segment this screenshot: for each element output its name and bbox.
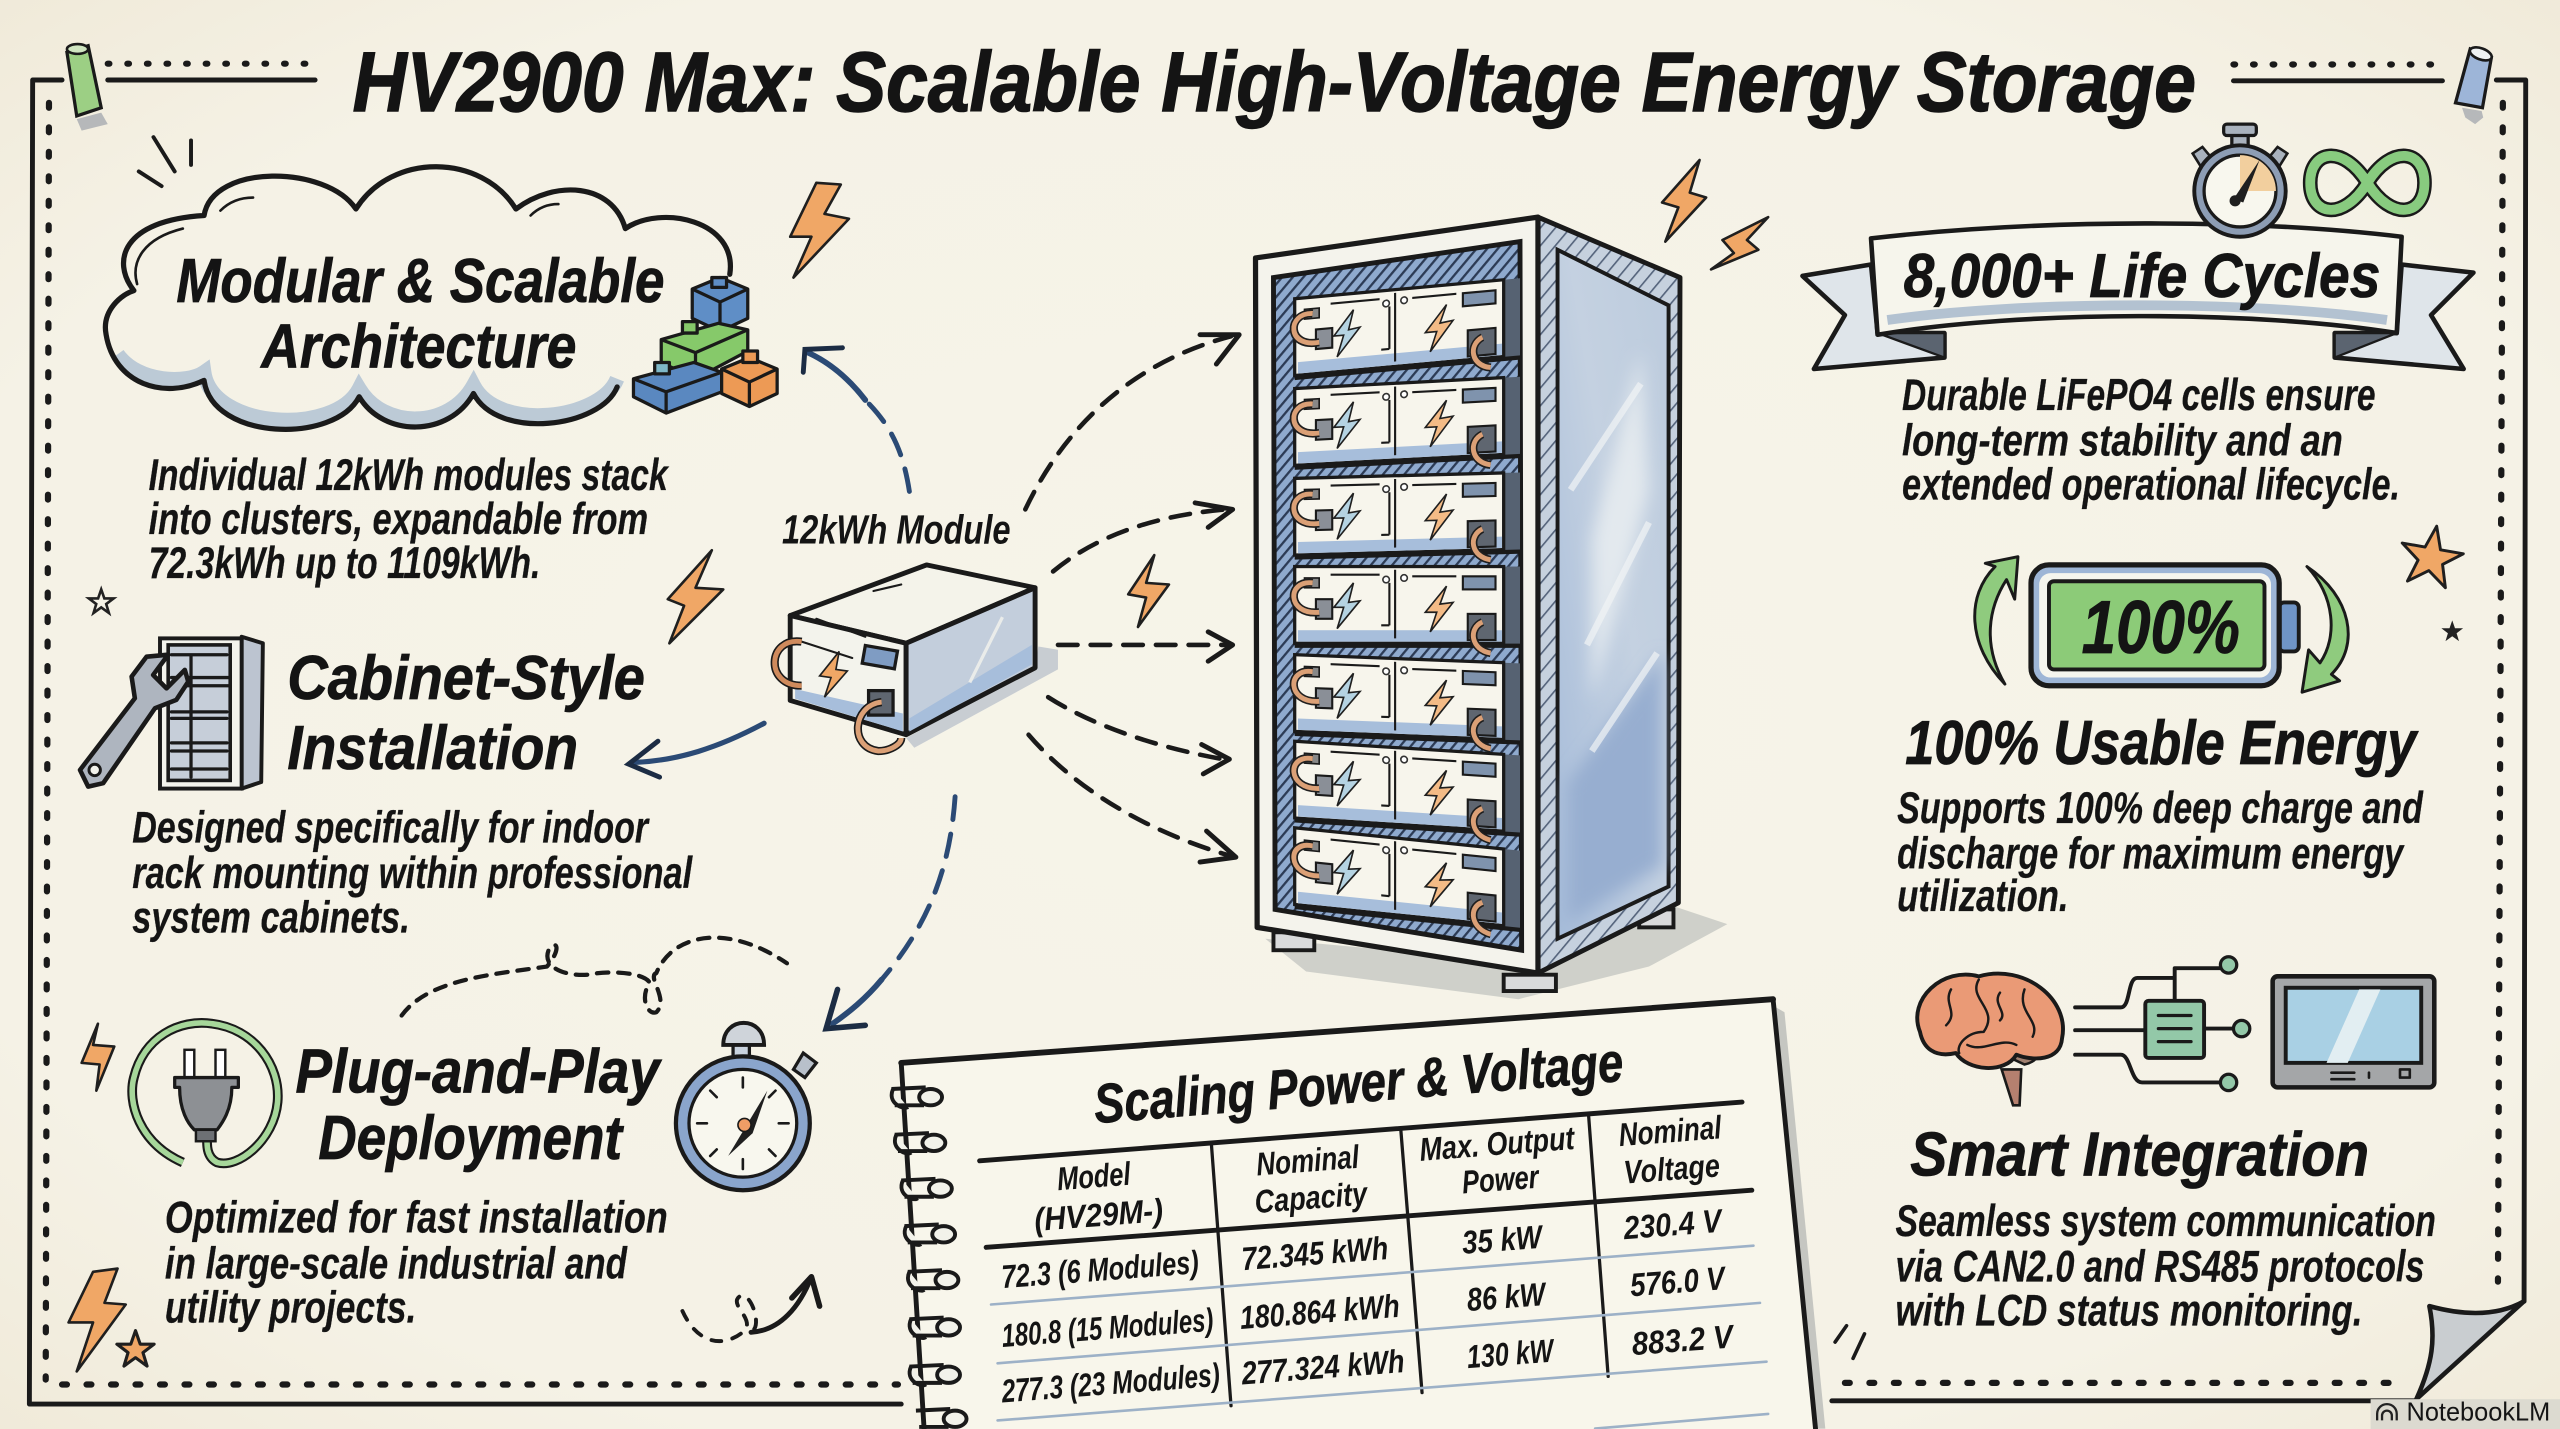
body text: long-term stability and an bbox=[1902, 417, 2343, 466]
icon: lightning bolt near arrows bbox=[1128, 555, 1169, 627]
front frame bbox=[1256, 217, 1538, 973]
heading: Smart Integration bbox=[1910, 1121, 2369, 1190]
table row: 180.8: 576.0 V bbox=[1629, 1259, 1729, 1303]
panel: cabinet-style installation: Installation bbox=[287, 714, 578, 783]
body text: into clusters, expandable from bbox=[149, 495, 648, 544]
panel: plug-and-play deployment: Deployment bbox=[318, 1104, 624, 1173]
body text: rack mounting within professional bbox=[132, 849, 693, 898]
body text bbox=[165, 1194, 668, 1332]
icon: charge arrow left bbox=[1975, 557, 2018, 684]
heading: Cabinet-Style bbox=[287, 644, 645, 713]
table header row: Nominal bbox=[1617, 1108, 1723, 1153]
decorative dashed loop bbox=[402, 938, 787, 1016]
illustration: 12kWh battery module bbox=[775, 565, 1058, 751]
body text: utilization. bbox=[1897, 872, 2069, 921]
table row: 72.3: 72.345 kWh bbox=[1240, 1229, 1389, 1277]
icon: discharge arrow right bbox=[2302, 567, 2348, 692]
icon: brain bbox=[1917, 974, 2063, 1105]
panel: modular and scalable architecture bbox=[105, 137, 730, 588]
icon: battery 100%: 100% bbox=[2082, 585, 2240, 669]
icon: stopwatch bbox=[676, 1023, 816, 1190]
icon: green pencil roll top left bbox=[67, 44, 108, 131]
table row: 277.3: 277.3 (23 Modules) bbox=[999, 1356, 1221, 1410]
side panel bbox=[1538, 217, 1680, 973]
table header row: Power bbox=[1461, 1158, 1542, 1200]
illustration: battery rack cabinet bbox=[1256, 217, 1727, 999]
icon: lightning bolt above rack bbox=[1662, 160, 1706, 242]
table row: 72.3 bbox=[1000, 1202, 1725, 1295]
body text: Optimized for fast installation bbox=[165, 1194, 668, 1243]
decorative dashed arrow bbox=[682, 1277, 820, 1341]
panel: life cycles bbox=[1802, 124, 2473, 510]
body text bbox=[1902, 371, 2400, 510]
page curl corner bbox=[2416, 1301, 2524, 1399]
table header row bbox=[1033, 1108, 1723, 1238]
arrow: module to rack bottom bbox=[1029, 735, 1236, 862]
table header row: Nominal bbox=[1255, 1138, 1361, 1183]
icon: ribbon banner bbox=[1802, 223, 2473, 369]
icon: lightning bolt bottom left bbox=[69, 1269, 126, 1371]
icon: building blocks bbox=[633, 278, 777, 413]
body text bbox=[1896, 1197, 2436, 1336]
sparkle lines bbox=[139, 137, 191, 186]
icon: small orange star bbox=[117, 1331, 154, 1366]
icon: timer bbox=[2193, 124, 2287, 237]
body text: Supports 100% deep charge and bbox=[1897, 784, 2424, 833]
spiral binding bbox=[891, 1087, 967, 1427]
table header row: Capacity bbox=[1253, 1174, 1370, 1220]
table row: 180.8: 180.8 (15 Modules) bbox=[1000, 1301, 1215, 1354]
panel: modular and scalable architecture: Architecture bbox=[259, 312, 576, 381]
heading: 8,000+ Life Cycles bbox=[1904, 242, 2380, 311]
icon: lightning bolt mid-left bbox=[668, 550, 723, 643]
icon: small outline star bbox=[89, 589, 114, 613]
heading: 100% Usable Energy bbox=[1905, 709, 2419, 778]
body text: utility projects. bbox=[165, 1283, 416, 1332]
table row: 72.3: 35 kW bbox=[1461, 1218, 1546, 1261]
sparkle strokes bottom right bbox=[1835, 1326, 1864, 1358]
rack feet bbox=[1273, 909, 1673, 991]
icon: lightning bolt right of rack bbox=[1711, 217, 1768, 269]
icon: LCD tablet bbox=[2273, 976, 2434, 1087]
body text bbox=[149, 451, 670, 588]
icon: cabinet and wrench bbox=[80, 637, 263, 789]
rack floor shadow bbox=[1265, 906, 1727, 999]
arrow: module to plug-and-play bbox=[826, 797, 955, 1029]
icon: infinity bbox=[2310, 156, 2424, 210]
panel: usable energy bbox=[1897, 557, 2424, 921]
arrow: module to modular architecture bbox=[803, 348, 909, 491]
table row: 180.8: 86 kW bbox=[1465, 1275, 1549, 1318]
table row: 277.3: 130 kW bbox=[1465, 1331, 1557, 1375]
table header row: (HV29M-) bbox=[1033, 1191, 1164, 1238]
panel: smart integration bbox=[1896, 957, 2436, 1336]
icon: large orange star bbox=[2396, 521, 2467, 590]
label: 12kWh module: 12kWh Module bbox=[782, 507, 1011, 553]
table grid bbox=[980, 1102, 1768, 1429]
body text: discharge for maximum energy bbox=[1897, 830, 2405, 879]
table row: 180.8: 180.864 kWh bbox=[1239, 1287, 1401, 1336]
table header row: Model bbox=[1056, 1155, 1132, 1197]
icon: battery 100% bbox=[2031, 565, 2299, 686]
body text: Durable LiFePO4 cells ensure bbox=[1902, 371, 2376, 420]
table row: 72.3: 72.3 (6 Modules) bbox=[1000, 1243, 1200, 1295]
title: HV2900 Max: Scalable High-Voltage Energy Storage bbox=[353, 34, 2196, 129]
arrow: module to rack lower bbox=[1048, 697, 1229, 774]
body text: 72.3kWh up to 1109kWh. bbox=[149, 539, 540, 588]
table row: 277.3 bbox=[999, 1317, 1737, 1410]
heading: Modular & Scalable bbox=[176, 247, 664, 316]
watermark: NotebookLM: NotebookLM bbox=[2407, 1396, 2550, 1426]
icon: circuit bbox=[2075, 957, 2250, 1091]
body text: Designed specifically for indoor bbox=[132, 803, 650, 852]
table row: 277.3: 277.324 kWh bbox=[1239, 1342, 1406, 1392]
battery modules bbox=[1294, 278, 1520, 385]
icon: small black star bbox=[2441, 620, 2463, 641]
table row: 180.8 bbox=[1000, 1259, 1729, 1354]
icon: lightning bolt top bbox=[790, 183, 849, 278]
table header row: Max. Output bbox=[1418, 1119, 1577, 1168]
panel: cabinet-style installation bbox=[80, 637, 693, 942]
body text bbox=[132, 803, 693, 942]
icon: plug in ring bbox=[132, 1023, 278, 1163]
table header row: Voltage bbox=[1622, 1146, 1721, 1191]
body text: in large-scale industrial and bbox=[165, 1239, 628, 1288]
table heading: Scaling Power & Voltage bbox=[1092, 1031, 1625, 1135]
table row: 72.3: 230.4 V bbox=[1621, 1202, 1725, 1246]
body text: extended operational lifecycle. bbox=[1902, 461, 2400, 510]
arrow: module to rack top bbox=[1025, 335, 1239, 509]
panel: plug-and-play deployment bbox=[132, 1023, 668, 1332]
icon: lightning bolt small left bbox=[82, 1024, 114, 1091]
heading: Plug-and-Play bbox=[296, 1037, 663, 1106]
arrow: module to rack upper bbox=[1053, 503, 1233, 571]
body text: system cabinets. bbox=[132, 893, 410, 942]
table row: 277.3: 883.2 V bbox=[1630, 1317, 1737, 1362]
body text: Individual 12kWh modules stack bbox=[149, 451, 670, 500]
arrow: module to rack middle bbox=[1058, 632, 1233, 661]
icon: blue pencil roll top right bbox=[2456, 45, 2493, 124]
body text: with LCD status monitoring. bbox=[1896, 1287, 2362, 1336]
arrow: module to cabinet installation bbox=[629, 723, 764, 777]
body text: via CAN2.0 and RS485 protocols bbox=[1896, 1243, 2424, 1292]
panel: specifications notepad bbox=[891, 999, 1825, 1429]
body text bbox=[1897, 784, 2424, 921]
